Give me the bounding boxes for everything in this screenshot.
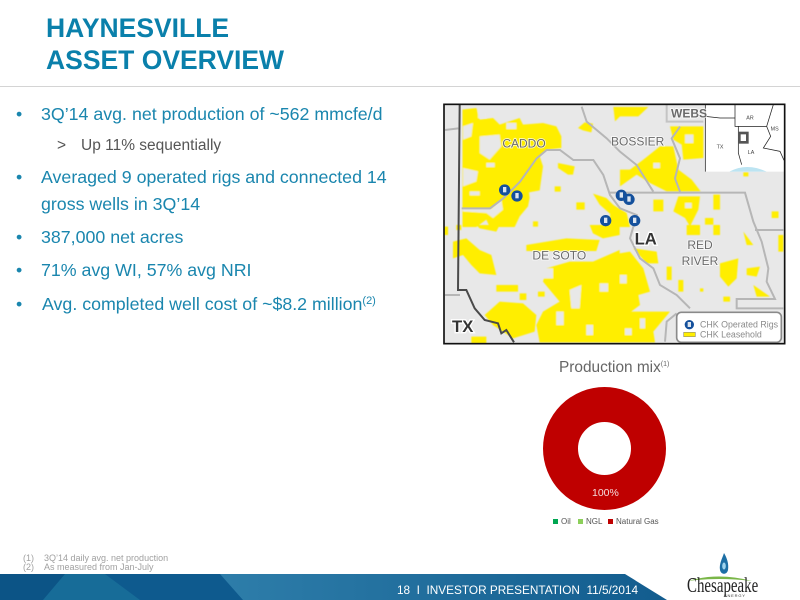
bullet: WI and NRI	[16, 260, 252, 280]
chart legend: Natural Gas	[616, 517, 659, 526]
parish labels: WEBS	[671, 107, 707, 121]
chart legend: Oil	[561, 517, 571, 526]
state labels: TX	[452, 317, 473, 336]
bullet: production	[16, 104, 383, 124]
bullet: WI and NRI: •	[16, 260, 22, 280]
title	[46, 13, 284, 75]
footnotes: (1)	[23, 553, 34, 563]
chart title: Production mix(1)	[559, 359, 669, 376]
bullet: net acres	[16, 227, 183, 247]
sub-bullet: sequential growth: >	[57, 137, 66, 154]
bullet list: Averaged 9 operated rigs and connected 14	[41, 167, 387, 187]
sub-bullet: sequential growth	[57, 137, 222, 154]
locator inset map: AR	[746, 116, 754, 122]
rig markers	[499, 184, 640, 226]
bullet: rigs and wells	[16, 167, 387, 214]
parish labels: RIVER	[682, 254, 719, 268]
bullet: production: •	[16, 104, 22, 124]
bullet list: 71% avg WI, 57% avg NRI	[41, 260, 252, 280]
parish labels: RED	[687, 238, 713, 252]
logo tagline: ENERGY	[724, 593, 746, 598]
leasehold acreage	[443, 107, 783, 343]
parish labels: BOSSIER	[611, 135, 665, 149]
bullet: well cost	[16, 294, 376, 314]
bullet: net acres: •	[16, 227, 22, 247]
state border Texas-Louisiana	[458, 105, 514, 342]
footnotes: 3Q’14 daily avg. net production	[44, 553, 168, 563]
map legend: CHK Operated Rigs	[700, 319, 779, 329]
map: Haynesville acreage	[443, 104, 786, 581]
parish boundaries	[445, 105, 783, 342]
map legend: CHK Leasehold	[700, 330, 762, 340]
title divider	[0, 86, 800, 87]
locator inset map: MS	[771, 127, 779, 133]
chart legend	[553, 517, 659, 526]
title: HAYNESVILLE	[46, 13, 229, 43]
bullet list: gross wells in 3Q’14	[41, 194, 200, 214]
state labels	[452, 230, 657, 336]
locator inset map	[705, 105, 785, 172]
logo flame icon	[688, 553, 752, 581]
footnotes: As measured from Jan-July	[44, 562, 154, 572]
parish labels: DE SOTO	[532, 248, 586, 262]
title: ASSET OVERVIEW	[46, 45, 284, 75]
state labels: LA	[635, 230, 657, 249]
bullet: rigs and wells: •	[16, 167, 22, 187]
bullet list	[16, 104, 387, 314]
locator inset map: TX	[717, 144, 724, 150]
chart legend: NGL	[586, 517, 602, 526]
footer band	[0, 574, 667, 600]
donut value label: 100%	[592, 487, 619, 499]
bullet list: Up 11% sequentially	[81, 137, 221, 154]
bullet list: Avg. completed well cost of ~$8.2 million(2)	[42, 294, 376, 314]
bullet list: 387,000 net acres	[41, 227, 183, 247]
donut chart: production mix	[543, 387, 666, 510]
parish labels	[502, 107, 719, 268]
footnotes: (2)	[23, 562, 34, 572]
map legend	[677, 312, 781, 342]
bullet: well cost: •	[16, 294, 22, 314]
footer text: 18 I INVESTOR PRESENTATION 11/5/2014	[397, 583, 638, 597]
footnotes	[23, 553, 168, 572]
logo: Chesapeake	[687, 553, 758, 598]
locator inset map: LA	[748, 150, 755, 156]
parish labels: CADDO	[502, 137, 546, 151]
bullet list: 3Q’14 avg. net production of ~562 mmcfe/d	[41, 104, 383, 124]
logo wordmark: Chesapeake	[687, 573, 758, 597]
